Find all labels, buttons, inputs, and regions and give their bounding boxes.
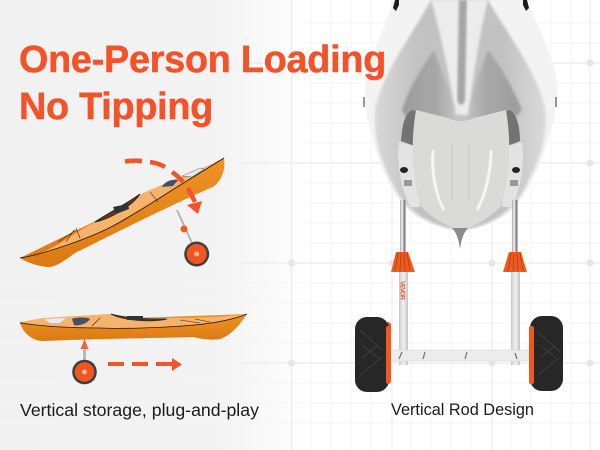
left vertical rod [400, 200, 406, 255]
right wheel [529, 316, 563, 391]
hatch [72, 318, 90, 325]
left cone collar [391, 252, 415, 272]
level kayak illustration [20, 314, 247, 341]
stern plate [413, 110, 509, 230]
tilted kayak illustration [20, 158, 224, 267]
VEVOR rod label: VEVOR [398, 281, 406, 300]
right vertical rod [512, 200, 518, 255]
caption: vertical rod design: Vertical Rod Design [391, 401, 534, 419]
title: One-Person Loading [19, 38, 386, 80]
side mounts [398, 142, 523, 207]
recessed scupper right [501, 110, 520, 146]
hull [20, 314, 247, 341]
kayak stern view [364, 0, 557, 249]
cross bar [388, 350, 530, 361]
dark grey facets [402, 50, 460, 122]
detached wheel with rod [177, 210, 209, 266]
hull [20, 158, 224, 267]
right cone collar [503, 252, 527, 272]
lower rod left [399, 270, 408, 365]
cockpit [111, 314, 167, 321]
deck [20, 314, 247, 328]
deck [20, 158, 224, 258]
dashed right arrow [108, 358, 182, 371]
centre keel [431, 0, 488, 115]
title [19, 38, 386, 128]
recessed scupper left [401, 110, 420, 146]
lower rod right [511, 270, 520, 365]
title: No Tipping [19, 85, 213, 127]
shaded hull sides [375, 0, 546, 230]
curved dashed arrow [125, 161, 202, 214]
keel fin [452, 228, 468, 249]
caption: vertical storage: Vertical storage, plug-and-play [20, 400, 259, 420]
hull silhouette [365, 0, 557, 249]
hatch [162, 180, 178, 187]
left wheel [355, 317, 391, 392]
vertical rod cart illustration [355, 200, 563, 392]
detached wheel with up arrow [72, 339, 97, 384]
cockpit [95, 194, 140, 222]
left panel background [0, 0, 310, 450]
